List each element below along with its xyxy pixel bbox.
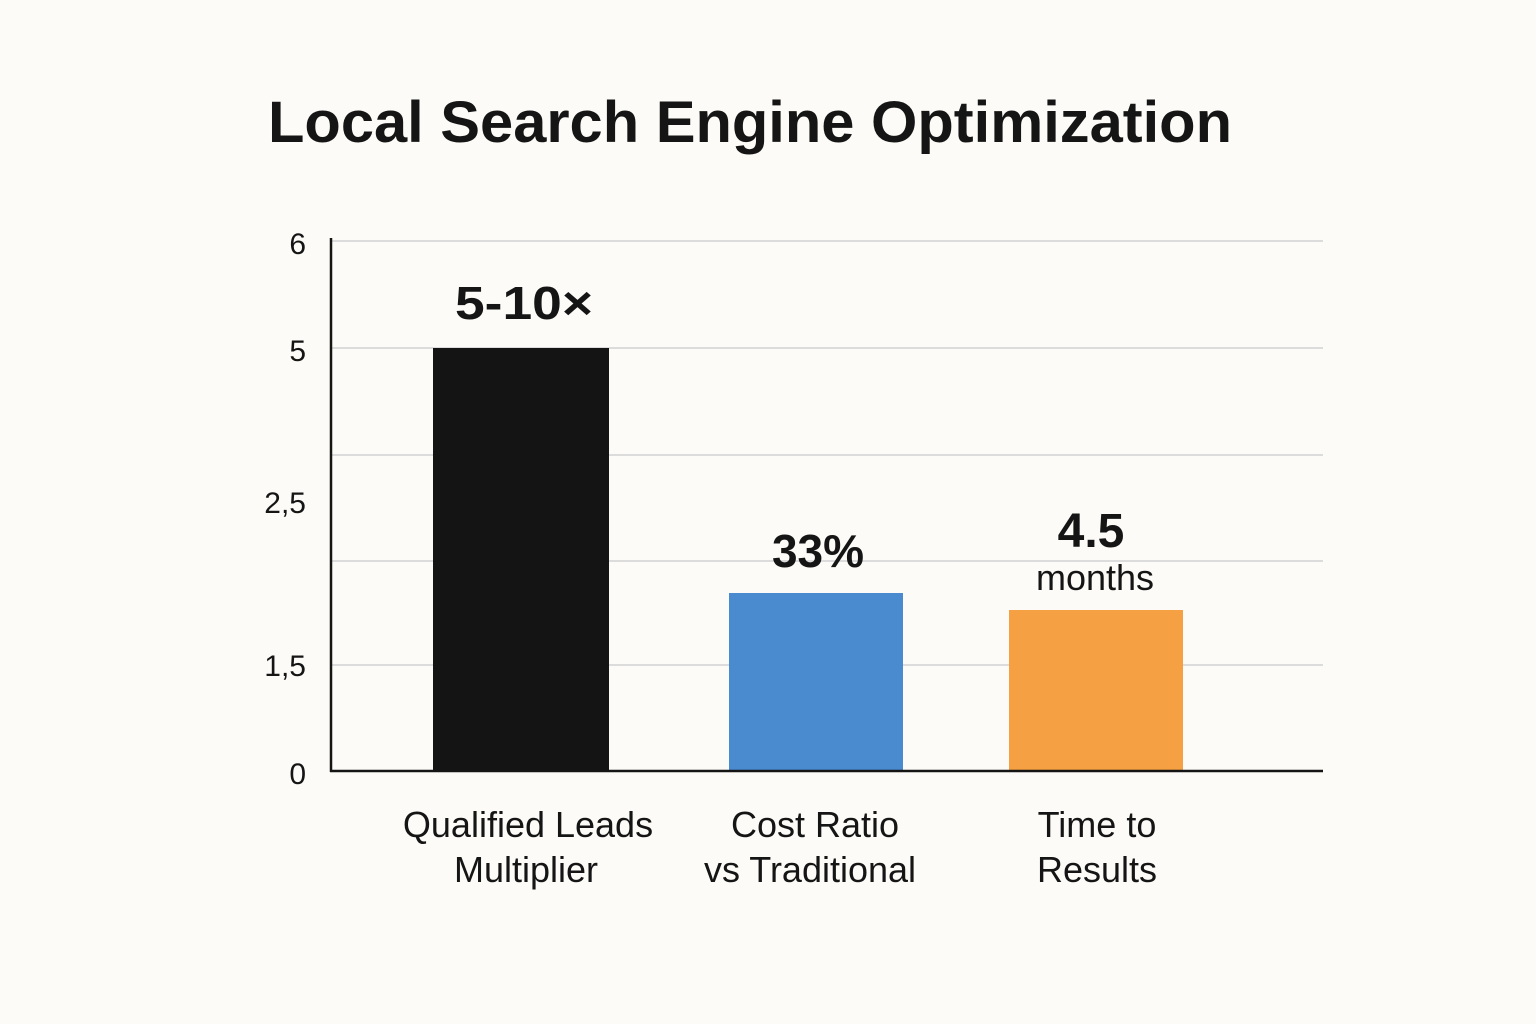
y-axis labels: 2,5 [264, 487, 306, 520]
y-axis labels: 6 [289, 228, 306, 261]
category labels: vs Traditional [704, 849, 916, 890]
category labels: Cost Ratio [731, 804, 899, 845]
bar: cost ratio [729, 593, 903, 771]
y-axis labels: 1,5 [264, 650, 306, 683]
chart: months [1036, 557, 1154, 598]
y-axis labels: 5 [289, 335, 306, 368]
title: Local Search Engine Optimization [268, 90, 1232, 155]
axes [330, 238, 1323, 772]
y-axis labels [264, 228, 306, 791]
bar: time to results [1009, 610, 1183, 771]
value labels: 33% [772, 525, 864, 577]
value labels [455, 277, 1124, 577]
category labels: Results [1037, 849, 1157, 890]
category labels: Multiplier [454, 849, 598, 890]
bar: qualified leads [433, 348, 609, 771]
category labels [403, 804, 1157, 890]
value labels: 4.5 [1058, 505, 1124, 558]
category labels: Qualified Leads [403, 804, 653, 845]
category labels: Time to [1038, 804, 1156, 845]
chart [264, 228, 1323, 890]
value labels: 5-10× [455, 277, 593, 329]
y-axis labels: 0 [289, 758, 306, 791]
